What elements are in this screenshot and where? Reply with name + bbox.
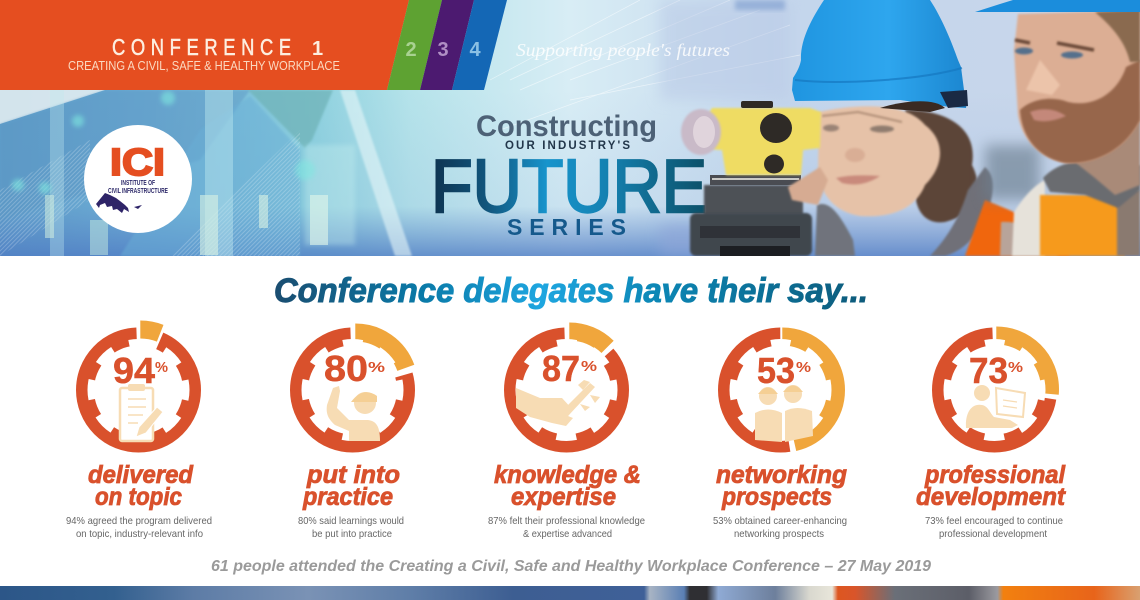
SERIES: SERIES xyxy=(507,214,626,240)
stat 5: professional development: professional development xyxy=(939,528,1047,540)
stat 3: knowledge and expertise: % xyxy=(581,358,597,375)
photo: surveyor with hard hat xyxy=(681,0,1140,256)
icon: two workers in hard hats xyxy=(755,385,813,442)
man's eyes and nose xyxy=(1015,40,1094,95)
Constructing: Constructing xyxy=(476,110,657,143)
conference 3 purple tab xyxy=(420,0,474,90)
conference 2 green tab xyxy=(387,0,442,90)
stat 5: professional development xyxy=(916,336,1067,540)
heading: professional xyxy=(924,461,1066,489)
man's hard hat brim xyxy=(975,0,1140,12)
stat 2: put into practice: be put into practice xyxy=(312,528,392,540)
background blur behind man xyxy=(985,145,1040,200)
gear gauge 53% xyxy=(727,336,836,444)
stat 2: put into practice: % xyxy=(368,359,385,376)
man's hair xyxy=(1095,10,1140,62)
heading: delivered xyxy=(88,461,194,489)
stat 1: delivered on topic xyxy=(66,330,212,540)
description: 87% felt their professional knowledge xyxy=(488,515,645,527)
value 80%: 80 xyxy=(324,348,368,389)
heading: put into xyxy=(306,461,400,489)
conference subtitle: CREATING A CIVIL, SAFE & HEALTHY WORKPLACE xyxy=(68,58,340,73)
ICI logo xyxy=(84,125,192,233)
man's face xyxy=(1014,10,1140,163)
value 94%: 94 xyxy=(113,350,155,391)
conference title: CONFERENCE xyxy=(112,35,291,61)
logo letters: ICI xyxy=(110,142,165,184)
conference navigation band xyxy=(0,0,507,90)
value 87%: 87 xyxy=(542,348,580,389)
gear gauge 73% xyxy=(941,336,1050,444)
conference 4 blue tab xyxy=(452,0,507,90)
man's vest and collar xyxy=(1012,180,1045,256)
stat 5: professional development: % xyxy=(1008,359,1023,376)
surveying level instrument xyxy=(681,101,821,256)
hair xyxy=(905,110,978,222)
logo name: INSTITUTE OF xyxy=(121,178,155,187)
ICI logo: CIVIL INFRASTRUCTURE xyxy=(108,186,168,195)
icon: hand holding calipers xyxy=(516,380,600,426)
number 3: 3 xyxy=(437,39,449,61)
gear gauge 87% xyxy=(513,332,623,444)
conference 1 orange tab xyxy=(0,0,409,90)
number 2: 2 xyxy=(405,39,417,61)
our industry's: OUR INDUSTRY'S xyxy=(505,140,630,152)
stat 1: delivered on topic: on topic, industry-relevant info xyxy=(76,528,203,540)
stat 4: networking prospects: networking prospects xyxy=(734,528,824,540)
stat 3: knowledge and expertise xyxy=(488,332,645,540)
tagline: Supporting people's futures xyxy=(516,40,730,60)
stat 4: networking prospects: % xyxy=(796,359,811,376)
stat 3: knowledge and expertise: & expertise advanced xyxy=(523,528,612,540)
number 4: 4 xyxy=(469,39,481,61)
logo half gear xyxy=(96,193,129,213)
woman's hard hat xyxy=(792,0,967,108)
value 73%: 73 xyxy=(969,350,1008,391)
value 53%: 53 xyxy=(757,350,795,391)
description: 53% obtained career-enhancing xyxy=(713,515,847,527)
stat 5: professional development: development xyxy=(916,483,1067,511)
eyes and lips xyxy=(822,112,902,184)
collar and vest xyxy=(815,204,855,256)
bottom photo strip xyxy=(0,586,1140,600)
gear gauge 94% xyxy=(85,330,194,444)
heading: networking xyxy=(716,461,847,489)
face xyxy=(818,106,940,216)
series title lockup xyxy=(431,110,707,240)
icon: worker with wrench xyxy=(327,386,380,441)
hero banner background xyxy=(0,0,1140,256)
stat 4: networking prospects: prospects xyxy=(721,483,832,511)
attendance footnote: 61 people attended the Creating a Civil, Safe and Healthy Workplace Conference – 27 May 2019 xyxy=(211,558,931,575)
gear gauge 80% xyxy=(299,332,409,444)
icon: clipboard and pen xyxy=(120,384,163,441)
stat 3: knowledge and expertise: expertise xyxy=(511,483,616,511)
man's beard xyxy=(1020,60,1140,163)
icon: person at computer xyxy=(966,385,1025,428)
description: 94% agreed the program delivered xyxy=(66,515,212,527)
stat 2: put into practice xyxy=(298,332,409,540)
FUTURE: FUTURE xyxy=(431,144,707,228)
stat 2: put into practice: practice xyxy=(302,483,393,511)
description: 73% feel encouraged to continue xyxy=(925,515,1063,527)
conference number 1: 1 xyxy=(312,38,323,60)
stat 1: delivered on topic: % xyxy=(155,359,168,376)
hand xyxy=(788,167,828,205)
stat 4: networking prospects xyxy=(713,336,847,540)
main heading: Conference delegates have their say... xyxy=(274,272,868,310)
stat 1: delivered on topic: on topic xyxy=(95,483,182,511)
heading: knowledge & xyxy=(494,461,641,489)
description: 80% said learnings would xyxy=(298,515,404,527)
